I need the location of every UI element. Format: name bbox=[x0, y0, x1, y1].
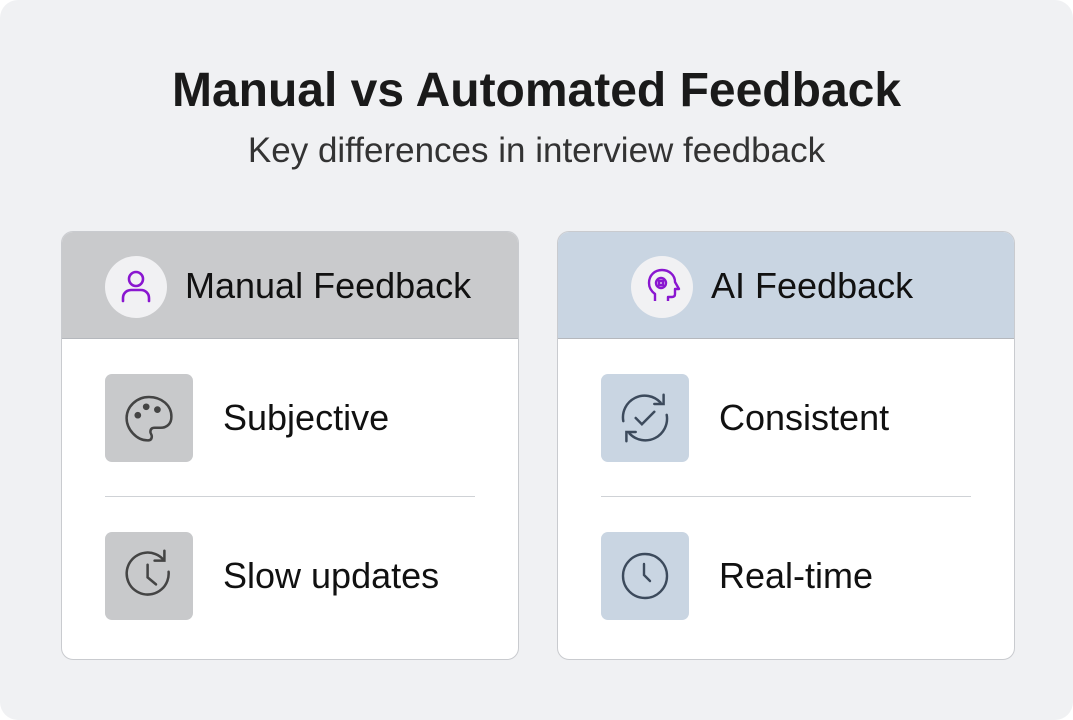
item: real-time bbox=[601, 532, 873, 620]
subtitle: Key differences in interview feedback bbox=[248, 131, 825, 170]
item: consistent bbox=[601, 374, 889, 462]
icon: sync check bbox=[601, 374, 689, 462]
title: Manual vs Automated Feedback bbox=[172, 64, 901, 117]
header title: AI Feedback bbox=[711, 265, 913, 306]
icon: clock refresh bbox=[105, 532, 193, 620]
icon: person bbox=[105, 256, 167, 318]
header title: Manual Feedback bbox=[185, 265, 471, 306]
icon: palette bbox=[105, 374, 193, 462]
icon: clock bbox=[601, 532, 689, 620]
panel: AI feedback bbox=[557, 231, 1015, 660]
item: slow updates bbox=[105, 532, 439, 620]
label: Subjective bbox=[223, 397, 389, 438]
item: subjective bbox=[105, 374, 389, 462]
panel: manual feedback bbox=[61, 231, 519, 660]
label: Slow updates bbox=[223, 555, 439, 596]
header: AI bbox=[558, 232, 1014, 339]
label: Consistent bbox=[719, 397, 889, 438]
header: manual bbox=[62, 232, 518, 339]
label: Real-time bbox=[719, 555, 873, 596]
icon: AI head bbox=[631, 256, 693, 318]
